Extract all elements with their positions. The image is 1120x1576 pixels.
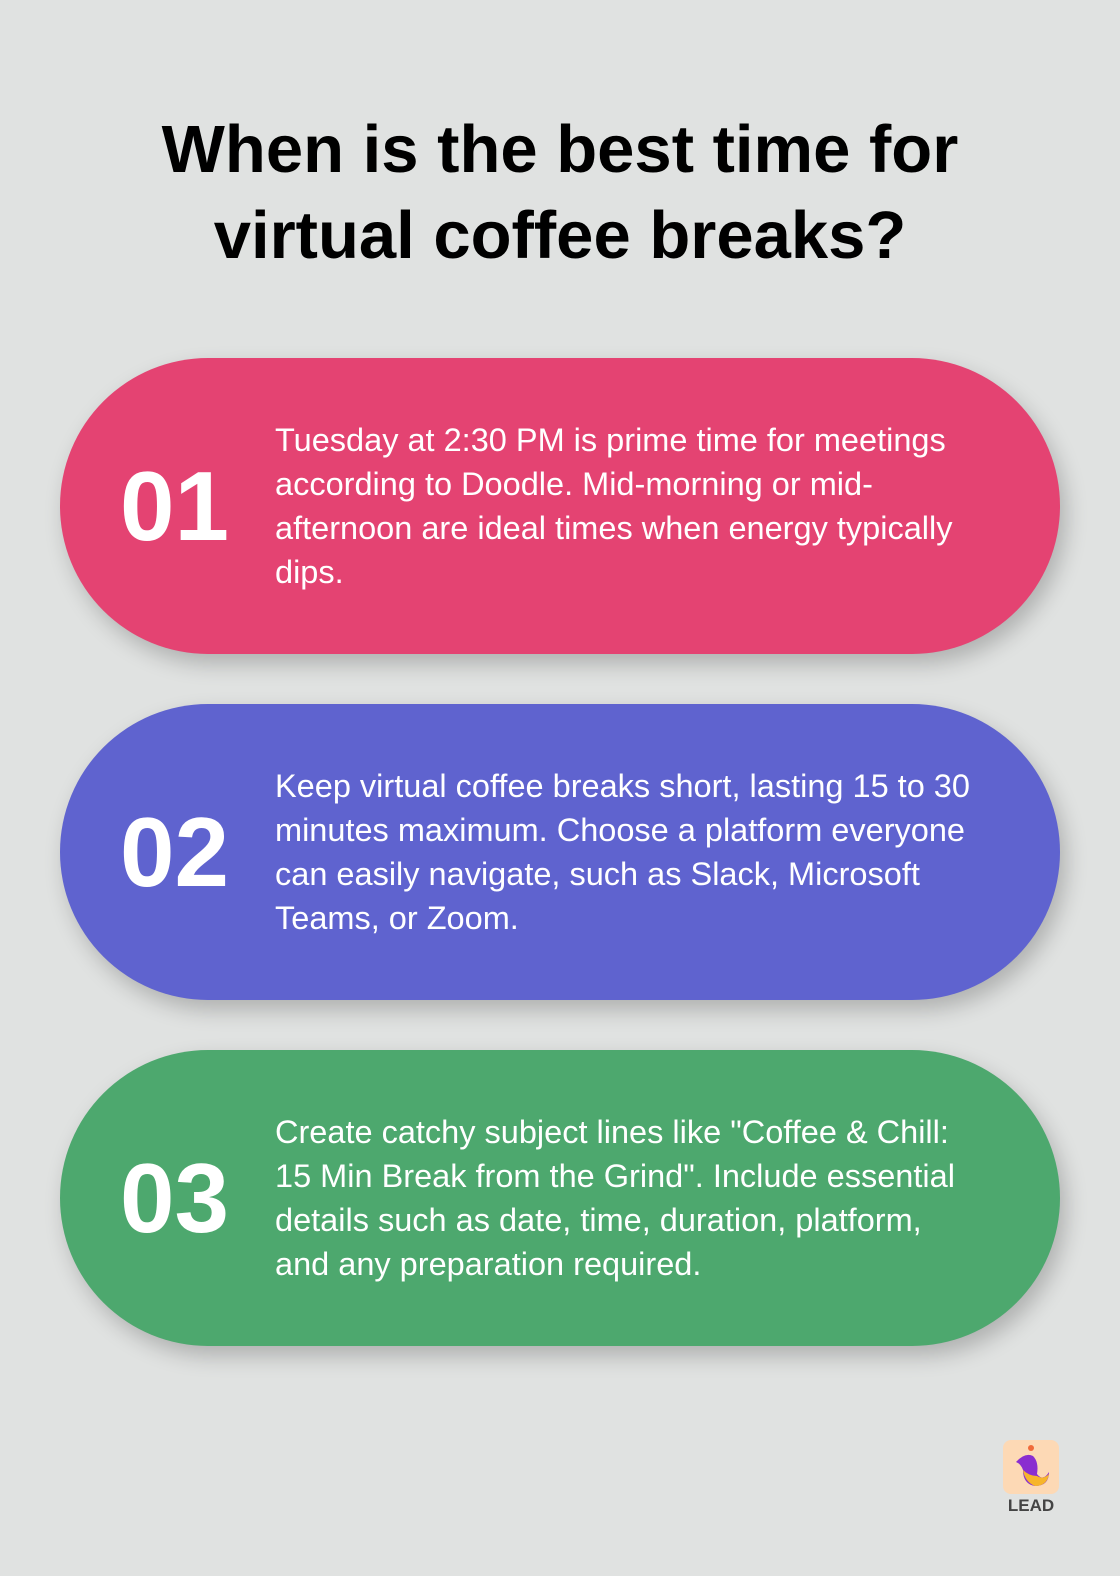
panel: step 02 bbox=[60, 704, 1060, 1000]
title: virtual coffee breaks? bbox=[214, 198, 906, 273]
panel: step 01 bbox=[60, 358, 1060, 654]
text 01: Tuesday at 2:30 PM is prime time for meetings according to Doodle. Mid-morning or mid-afternoon are ideal times when energy typically dips. bbox=[275, 422, 952, 590]
text 03 bbox=[275, 1114, 955, 1282]
number 01: 01 bbox=[120, 451, 229, 561]
logo bbox=[1003, 1440, 1059, 1515]
panel: step 03 bbox=[60, 1050, 1060, 1346]
text 03: details such as date, time, duration, platform, bbox=[275, 1202, 922, 1238]
text 02: Keep virtual coffee breaks short, lasting 15 to 30 minutes maximum. Choose a platform everyone can easily navigate, such as Slack, Microsoft Teams, or Zoom. bbox=[275, 768, 970, 936]
title: When is the best time for bbox=[162, 112, 958, 187]
logo text: LEAD bbox=[1008, 1496, 1054, 1515]
text 03: and any preparation required. bbox=[275, 1246, 701, 1282]
number 03: 03 bbox=[120, 1143, 229, 1253]
title bbox=[162, 112, 958, 273]
icon: logo mark bbox=[1003, 1440, 1059, 1494]
number 02: 02 bbox=[120, 797, 229, 907]
text 03: 15 Min Break from the Grind". Include essential bbox=[275, 1158, 955, 1194]
text 03: Create catchy subject lines like "Coffee & Chill: bbox=[275, 1114, 949, 1150]
